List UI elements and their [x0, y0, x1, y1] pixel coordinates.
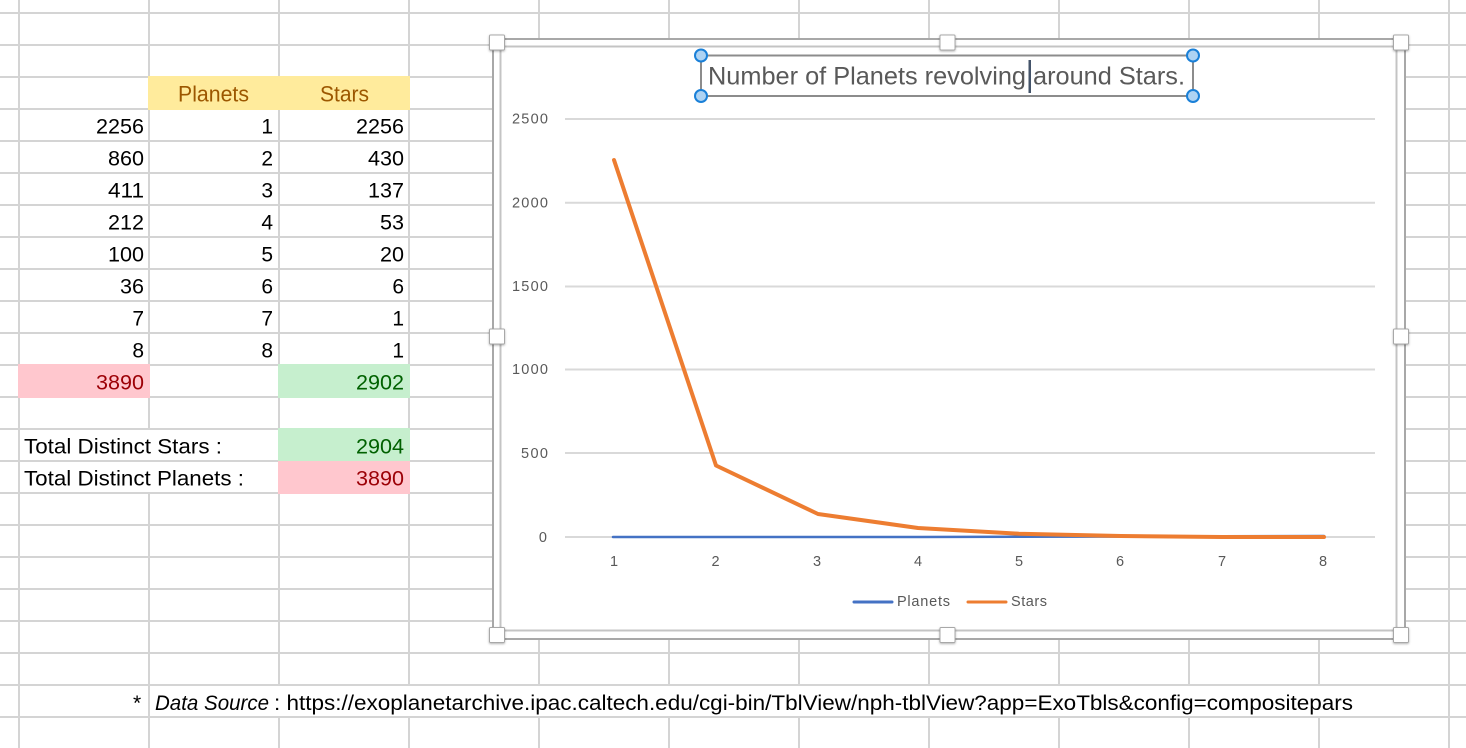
legend: Planets	[897, 594, 950, 610]
table header	[148, 76, 410, 110]
x axis labels: 1	[610, 554, 618, 570]
table rows: 4	[261, 212, 273, 234]
table rows: 2	[261, 148, 273, 170]
table rows: 8	[132, 340, 144, 362]
series: stars	[614, 160, 1324, 537]
y axis labels: 0	[539, 530, 547, 546]
y axis labels: 1000	[512, 362, 548, 378]
y axis labels: 2500	[512, 112, 548, 128]
sum: stars total: 2902	[356, 372, 404, 394]
gridlines	[565, 119, 1375, 537]
panel: data table	[18, 76, 410, 494]
table rows	[96, 116, 404, 362]
x axis labels: 3	[813, 554, 821, 570]
total distinct planets: Total Distinct Planets :	[24, 466, 244, 490]
table rows: 5	[261, 244, 273, 266]
x axis labels: 5	[1015, 554, 1023, 570]
table rows: 1	[392, 308, 404, 330]
table rows: 7	[261, 308, 273, 330]
x axis labels: 8	[1319, 554, 1327, 570]
chart title: Number of Planets revolving around Stars.	[708, 62, 1185, 90]
sum: planets total	[18, 364, 150, 398]
total distinct planets	[24, 461, 410, 494]
total distinct stars	[24, 428, 410, 461]
table rows: 411	[108, 180, 144, 202]
table rows: 1	[261, 116, 273, 138]
sum: planets total: 3890	[96, 372, 144, 394]
total distinct stars: 2904	[356, 436, 404, 458]
x axis labels: 2	[711, 554, 720, 570]
table rows: 860	[108, 148, 144, 170]
table rows: 100	[108, 244, 144, 266]
sum: stars total	[278, 364, 410, 398]
table rows: 2256	[96, 116, 144, 138]
data source footnote: Data Source	[155, 692, 269, 715]
table rows: 3	[261, 180, 273, 202]
table rows: 137	[368, 180, 404, 202]
x axis labels: 7	[1218, 554, 1226, 570]
y axis labels	[512, 112, 548, 546]
table rows: 212	[108, 212, 144, 234]
table rows: 36	[120, 276, 144, 298]
table rows: 2256	[356, 116, 404, 138]
table header: Planets	[178, 82, 249, 106]
panel: line chart	[490, 35, 1408, 642]
x axis labels: 6	[1116, 554, 1124, 570]
y axis labels: 2000	[512, 196, 548, 212]
table rows: 53	[380, 212, 404, 234]
resize handles	[490, 35, 1408, 642]
table rows: 6	[261, 276, 273, 298]
y axis labels: 1500	[512, 279, 548, 295]
table rows: 6	[392, 276, 404, 298]
table rows: 8	[261, 340, 273, 362]
total distinct planets: 3890	[356, 468, 404, 490]
y axis labels: 500	[521, 446, 548, 462]
table rows: 1	[392, 340, 404, 362]
chart selection frame	[493, 39, 1405, 639]
x axis labels: 4	[914, 554, 922, 570]
table rows: 430	[368, 148, 404, 170]
table rows: 7	[132, 308, 144, 330]
legend: Stars	[1011, 594, 1047, 610]
x axis labels	[610, 554, 1327, 570]
chart title	[695, 50, 1199, 102]
data source footnote: : https://exoplanetarchive.ipac.caltech.edu/cgi-bin/TblView/nph-tblView?app=ExoTbls&config=compositepars	[274, 692, 1353, 715]
data source footnote: *	[133, 692, 141, 715]
table rows: 20	[380, 244, 404, 266]
series: planets	[613, 536, 1324, 537]
legend	[854, 594, 1047, 610]
table header: Stars	[320, 82, 369, 106]
total distinct stars: Total Distinct Stars :	[24, 434, 222, 458]
